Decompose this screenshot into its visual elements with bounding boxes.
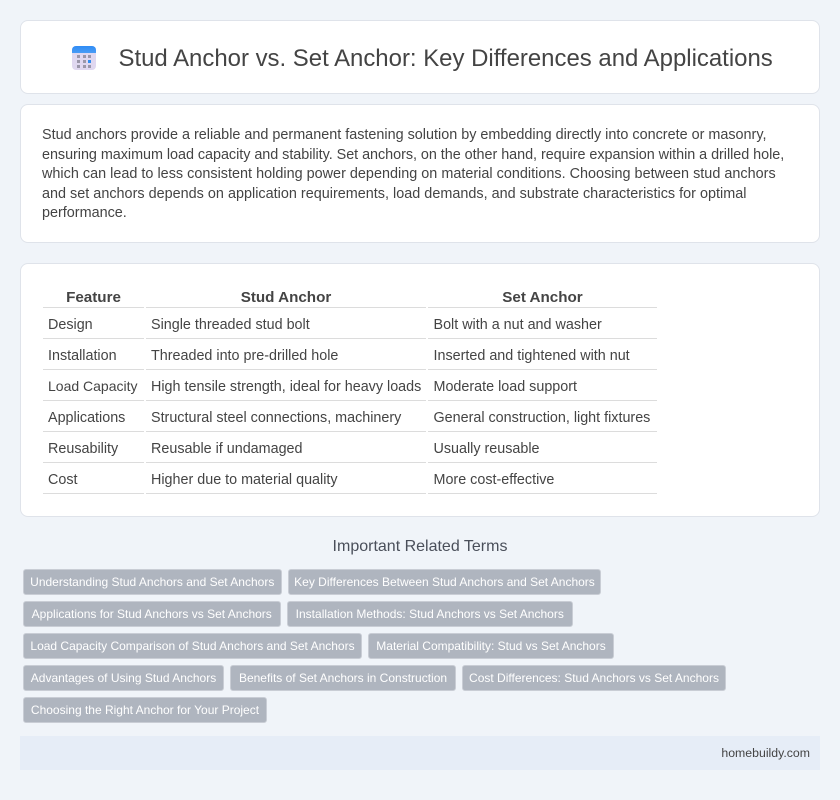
- row: Applications: Applications: [48, 410, 125, 426]
- header panel: [20, 20, 820, 94]
- tag: Benefits of Set Anchors in Construction: [239, 671, 447, 685]
- title: Stud Anchor vs. Set Anchor: Key Differences and Applications: [118, 45, 773, 72]
- comparison table panel: [20, 263, 820, 517]
- related terms tags: [23, 569, 726, 723]
- table header: Feature: Feature: [66, 289, 121, 306]
- tag: Load Capacity Comparison of Stud Anchors and Set Anchors: [30, 639, 355, 653]
- intro paragraph: performance.: [42, 205, 127, 221]
- tag: Installation Methods: Stud Anchors vs Set Anchors: [296, 607, 564, 621]
- Reusability stud: Reusable if undamaged: [151, 441, 303, 457]
- tag: [23, 665, 224, 690]
- intro paragraph: [42, 127, 784, 221]
- related terms heading: Important Related Terms: [333, 538, 507, 555]
- intro paragraph: which can lead to less consistent holding power depending on material conditions. Choosing between stud anchors: [42, 166, 776, 182]
- row: Installation: Installation: [48, 348, 117, 364]
- tag: Understanding Stud Anchors and Set Anchors: [30, 575, 274, 589]
- intro paragraph: and set anchors depends on application requirements, load demands, and substrate characteristics for optimal: [42, 186, 746, 202]
- tag: Key Differences Between Stud Anchors and Set Anchors: [294, 575, 595, 589]
- tag: [23, 633, 362, 658]
- footer bar: [20, 736, 820, 770]
- tag: Cost Differences: Stud Anchors vs Set Anchors: [469, 671, 719, 685]
- tag: [230, 665, 456, 690]
- row: Design: Design: [48, 317, 93, 333]
- Applications set: General construction, light fixtures: [434, 410, 650, 426]
- tag: [23, 569, 282, 594]
- row: Load Capacity: Load Capacity: [48, 378, 138, 394]
- tag: [287, 601, 572, 626]
- table header: Set Anchor: Set Anchor: [502, 289, 583, 306]
- Design stud: Single threaded stud bolt: [151, 317, 310, 333]
- Reusability set: Usually reusable: [434, 441, 540, 457]
- Load set: Moderate load support: [434, 379, 577, 395]
- tag: Choosing the Right Anchor for Your Project: [31, 703, 259, 717]
- icon: calendar: [72, 46, 96, 70]
- tag: [23, 697, 267, 722]
- tag: [462, 665, 726, 690]
- tag: Applications for Stud Anchors vs Set Anchors: [32, 607, 272, 621]
- tag: [288, 569, 601, 594]
- Load stud: High tensile strength, ideal for heavy loads: [151, 379, 421, 395]
- table header: Stud Anchor: Stud Anchor: [241, 289, 331, 306]
- tag: Advantages of Using Stud Anchors: [31, 671, 216, 685]
- Cost set: More cost-effective: [434, 472, 554, 488]
- intro paragraph: Stud anchors provide a reliable and permanent fastening solution by embedding directly into concrete or masonry,: [42, 127, 766, 143]
- row: Reusability: Reusability: [48, 441, 118, 457]
- tag: [23, 601, 280, 626]
- intro text panel: [20, 104, 820, 243]
- footer source: homebuildy.com: [721, 746, 810, 760]
- Installation set: Inserted and tightened with nut: [434, 348, 630, 364]
- row: Cost: Cost: [48, 472, 78, 488]
- Applications stud: Structural steel connections, machinery: [151, 410, 401, 426]
- tag: Material Compatibility: Stud vs Set Anchors: [376, 639, 606, 653]
- Installation stud: Threaded into pre-drilled hole: [151, 348, 338, 364]
- intro paragraph: ensuring maximum load capacity and stability. Set anchors, on the other hand, require expansion within a drilled hole,: [42, 147, 784, 163]
- Design set: Bolt with a nut and washer: [434, 317, 602, 333]
- tag: [368, 633, 614, 658]
- Cost stud: Higher due to material quality: [151, 472, 338, 488]
